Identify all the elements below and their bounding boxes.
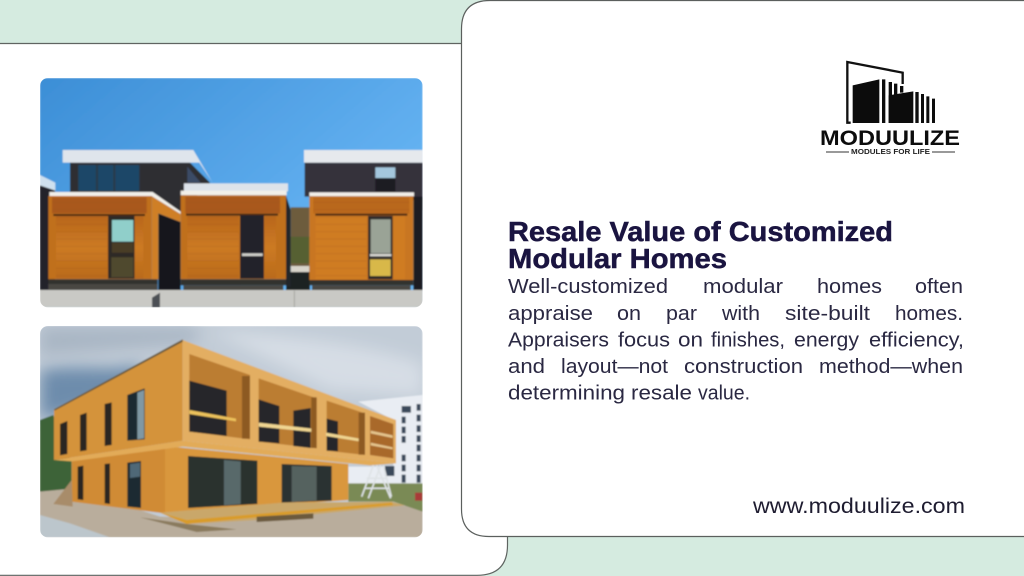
right white panel [462, 0, 1024, 536]
left white panel [0, 44, 508, 576]
scaffold [362, 465, 391, 498]
body text: Appraisers [508, 330, 609, 352]
photo: two-storey timber modular building under construction [40, 326, 423, 537]
upper left face [54, 340, 183, 460]
left upper storey [70, 163, 210, 212]
background apartment block [348, 395, 423, 485]
upper left windows [60, 421, 67, 455]
ground floor [72, 446, 165, 513]
upper front frame [183, 340, 396, 463]
recessed balcony 4 [370, 416, 393, 458]
body text: layout—not [561, 356, 668, 378]
recessed balcony 3 [327, 401, 365, 455]
top mint band [0, 0, 470, 43]
wood grain [52, 197, 409, 279]
body text: and [508, 356, 545, 378]
body text: on [617, 303, 641, 325]
concrete plinth [40, 290, 423, 307]
body text: appraise [508, 303, 593, 325]
body text: focus [618, 330, 670, 352]
body text: homes. [895, 303, 963, 325]
body text: Well-customized [508, 276, 668, 298]
body text: modular [703, 276, 783, 298]
body text: homes [817, 276, 882, 298]
body text: construction [684, 356, 803, 378]
body text: finishes, [711, 330, 785, 352]
bottom mint band [500, 537, 1024, 576]
body text [508, 276, 964, 404]
website url: www.moduulize.com [752, 495, 965, 518]
right upper storey [305, 163, 423, 210]
body text: on [678, 330, 703, 352]
body text: resale [631, 382, 692, 404]
logo mark: building outline [847, 62, 935, 123]
panel outline: left panel [0, 44, 508, 575]
logo: Moduulize [820, 62, 960, 156]
body text: value. [698, 382, 750, 404]
heading [508, 216, 893, 274]
logo tagline: MODULES FOR LIFE [851, 149, 930, 156]
logo tagline rules [826, 151, 955, 153]
body text: method—when [819, 356, 963, 378]
left orange volume [158, 213, 181, 290]
recessed balcony 2 [259, 378, 317, 448]
right orange volume [309, 192, 414, 196]
ground floor windows [78, 466, 83, 500]
body text: site-built [785, 303, 870, 325]
body text: efficiency, [869, 330, 964, 352]
gap with tree [291, 207, 309, 266]
slab / first floor band [54, 441, 396, 465]
tree [40, 415, 72, 492]
logo wordmark: MODUULIZE [820, 127, 960, 150]
far left house [40, 185, 55, 290]
heading: Resale Value of Customized [508, 216, 893, 247]
body text: par [666, 303, 697, 325]
body text: with [721, 303, 760, 325]
recessed balcony 1 [189, 354, 250, 439]
ground [40, 488, 423, 537]
left timber stack [53, 480, 73, 507]
middle volume [286, 195, 291, 287]
body text: determining [508, 382, 625, 404]
heading: Modular Homes [508, 243, 727, 274]
timber deck [160, 502, 405, 524]
body text: often [915, 276, 963, 298]
photo: modular homes with wood cladding under blue sky [40, 78, 423, 307]
body text: energy [794, 330, 859, 352]
